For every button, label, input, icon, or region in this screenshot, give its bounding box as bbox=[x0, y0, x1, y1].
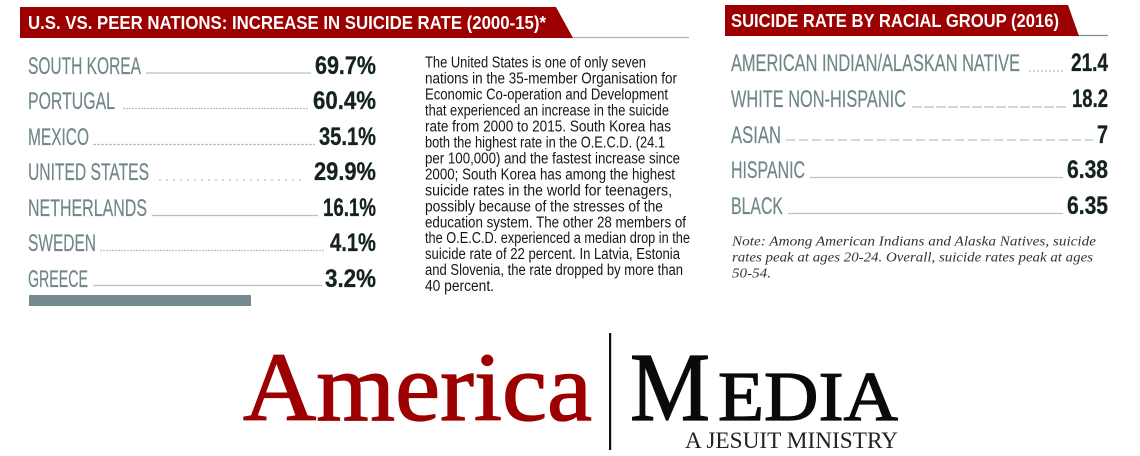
row: Black bbox=[731, 192, 1108, 220]
row: United States: UNITED STATES bbox=[28, 159, 149, 186]
row: South Korea: SOUTH KOREA bbox=[28, 53, 141, 80]
heading: racial group: SUICIDE RATE BY RACIAL GROUP (2016) bbox=[731, 11, 1059, 31]
logo: America Media: EDIA bbox=[718, 359, 898, 436]
row: Hispanic: HISPANIC bbox=[731, 157, 805, 184]
row: Greece: 3.2% bbox=[325, 265, 376, 293]
row: Netherlands bbox=[28, 194, 376, 222]
panel: racial group table bbox=[725, 5, 1108, 280]
text block: explanatory paragraph: suicide rates in the world for teenagers, bbox=[425, 182, 672, 200]
note: Note: Among American Indians and Alaska Natives, suicide bbox=[731, 234, 1096, 248]
row: Hispanic bbox=[731, 156, 1108, 184]
logo: America Media: America bbox=[243, 334, 592, 442]
row: United States: 29.9% bbox=[314, 158, 376, 186]
text block: explanatory paragraph: 40 percent. bbox=[425, 278, 494, 295]
row: Sweden bbox=[28, 229, 376, 257]
row: American Indian/Alaskan Native: 21.4 bbox=[1071, 49, 1108, 77]
heading: peer nations bbox=[20, 7, 573, 38]
row: Netherlands: 16.1% bbox=[323, 194, 376, 222]
row: Hispanic: 6.38 bbox=[1067, 156, 1108, 184]
logo: America Media: A JESUIT MINISTRY bbox=[685, 428, 898, 453]
text block: explanatory paragraph: both the highest rate in the O.E.C.D. (24.1 bbox=[425, 134, 665, 152]
row: Portugal: PORTUGAL bbox=[28, 88, 115, 115]
note: rates peak at ages 20-24. Overall, suicide rates peak at ages bbox=[732, 250, 1093, 264]
note bbox=[731, 234, 1096, 280]
text block: explanatory paragraph: nations in the 35-member Organisation for bbox=[425, 70, 677, 88]
row: Asian: ASIAN bbox=[731, 122, 781, 149]
text block: explanatory paragraph: possibly because of the stresses of the bbox=[425, 198, 663, 216]
text block: explanatory paragraph: suicide rate of 22 percent. In Latvia, Estonia bbox=[425, 246, 680, 263]
text block: explanatory paragraph bbox=[425, 54, 690, 295]
row: Greece bbox=[28, 265, 376, 293]
row: White non-Hispanic: WHITE NON-HISPANIC bbox=[731, 86, 906, 113]
row: United States bbox=[28, 158, 376, 186]
row: South Korea: 69.7% bbox=[315, 52, 376, 80]
row: Portugal: 60.4% bbox=[313, 87, 376, 115]
row: Asian: 7 bbox=[1097, 121, 1108, 149]
row: Mexico bbox=[28, 123, 376, 151]
row: Greece: GREECE bbox=[28, 266, 88, 293]
note: 50-54. bbox=[732, 266, 771, 280]
row: Black: 6.35 bbox=[1067, 192, 1108, 220]
text block: explanatory paragraph: the O.E.C.D. experienced a median drop in the bbox=[425, 230, 690, 247]
text block: explanatory paragraph: The United States is one of only seven bbox=[425, 54, 646, 72]
row: South Korea bbox=[28, 52, 376, 80]
footer bar bbox=[29, 295, 251, 306]
logo: America Media bbox=[243, 333, 898, 453]
row: Sweden: 4.1% bbox=[330, 229, 376, 257]
row: White non-Hispanic bbox=[731, 85, 1108, 113]
row: Netherlands: NETHERLANDS bbox=[28, 195, 147, 222]
row: Asian bbox=[731, 121, 1108, 149]
text block: explanatory paragraph: 2000; South Korea has among the highest bbox=[425, 166, 676, 184]
row: Mexico: MEXICO bbox=[28, 124, 89, 151]
row: Black: BLACK bbox=[731, 193, 783, 220]
text block: explanatory paragraph: Economic Co-operation and Development bbox=[425, 86, 669, 104]
text block: explanatory paragraph: per 100,000) and the fastest increase since bbox=[425, 150, 680, 168]
text block: explanatory paragraph: rate from 2000 to 2015. South Korea has bbox=[425, 118, 671, 136]
text block: explanatory paragraph: and Slovenia, the rate dropped by more than bbox=[425, 262, 683, 279]
row: White non-Hispanic: 18.2 bbox=[1072, 85, 1108, 113]
text block: explanatory paragraph: that experienced an increase in the suicide bbox=[425, 102, 669, 120]
logo: America Media: M bbox=[630, 334, 710, 442]
text block: explanatory paragraph: education system. The other 28 members of bbox=[425, 214, 687, 232]
row: Sweden: SWEDEN bbox=[28, 230, 96, 257]
row: Portugal bbox=[28, 87, 376, 115]
row: Mexico: 35.1% bbox=[319, 123, 376, 151]
panel: peer nations table bbox=[20, 7, 573, 306]
heading: peer nations: U.S. VS. PEER NATIONS: INCREASE IN SUICIDE RATE (2000-15)* bbox=[28, 13, 546, 33]
heading: racial group bbox=[725, 5, 1079, 36]
